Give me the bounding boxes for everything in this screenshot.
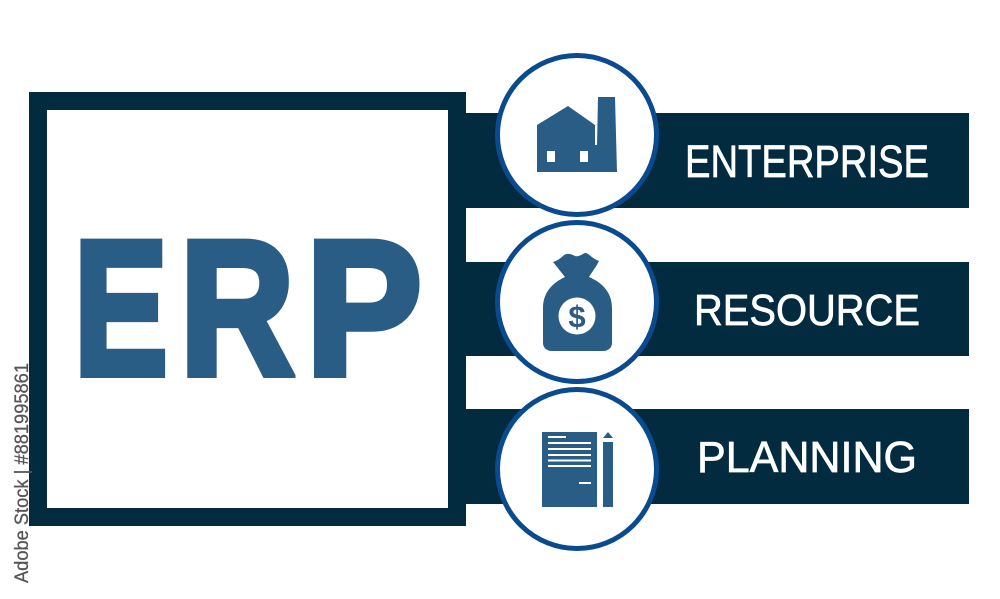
icon: money bag	[543, 253, 612, 351]
label: RESOURCE: RESOURCE	[694, 286, 920, 335]
icon: money bag: $	[568, 299, 586, 334]
icon: document and pencil	[542, 432, 613, 507]
title: ERP: P	[306, 202, 422, 415]
panel: enterprise bar	[466, 113, 969, 208]
circle: planning	[498, 390, 656, 548]
icon: factory	[537, 97, 617, 172]
watermark: stock id: Adobe Stock | #881995861	[12, 363, 33, 583]
circle: resource	[498, 222, 656, 382]
title: ERP	[74, 202, 422, 415]
panel: planning bar	[466, 409, 969, 504]
title: ERP: E	[74, 202, 168, 415]
label: PLANNING: PLANNING	[697, 433, 917, 482]
title: ERP: R	[180, 202, 294, 415]
panel: ERP square frame	[38, 101, 457, 517]
circle: enterprise	[498, 56, 656, 214]
label: ENTERPRISE: ENTERPRISE	[685, 136, 929, 187]
panel: resource bar	[466, 262, 969, 356]
